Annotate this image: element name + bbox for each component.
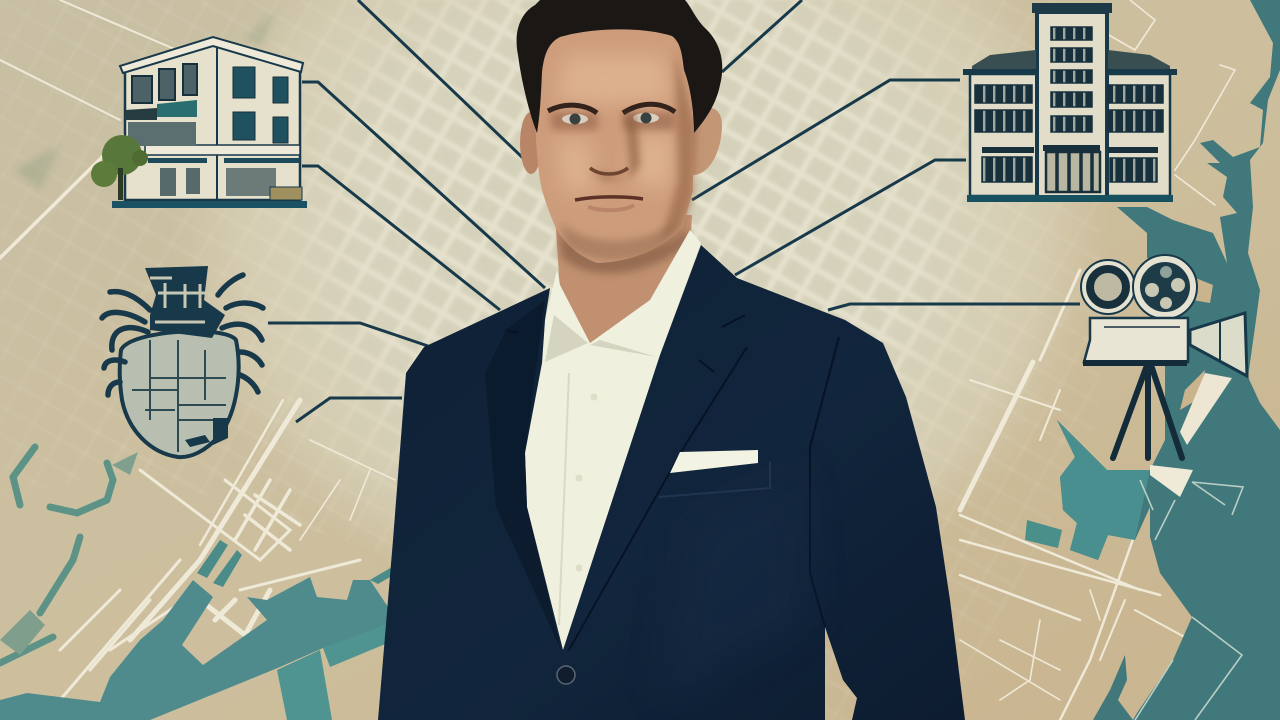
lower lip bbox=[588, 205, 634, 210]
icon: crest bbox=[102, 266, 263, 457]
pocket square bbox=[670, 450, 758, 473]
shirt bbox=[525, 230, 701, 650]
connector lines bbox=[268, 0, 1080, 422]
placket bbox=[559, 373, 569, 625]
icon: film camera bbox=[1081, 255, 1247, 458]
pocket outline bbox=[659, 462, 770, 497]
jacket button bbox=[557, 666, 575, 684]
forehead and cheek highlight bbox=[555, 55, 675, 195]
collar shade bbox=[545, 315, 657, 362]
man bbox=[378, 0, 965, 720]
left ear bbox=[520, 112, 542, 174]
water: right coast and sea bbox=[1025, 0, 1280, 720]
jacket bbox=[378, 245, 965, 720]
chin stubble shadow bbox=[560, 218, 680, 261]
neck shadow bbox=[558, 228, 690, 274]
eye sockets bbox=[550, 112, 675, 130]
water: left marshes bbox=[0, 447, 138, 663]
jacket shading bbox=[485, 300, 561, 650]
water: lower left bay bbox=[0, 540, 395, 720]
neck bbox=[555, 215, 692, 345]
face side shadow bbox=[660, 50, 696, 245]
shirt buttons bbox=[576, 394, 598, 572]
jacket highlight bbox=[660, 470, 810, 700]
eyes bbox=[562, 114, 588, 124]
hair bbox=[517, 0, 722, 133]
icon: classical tower building bbox=[963, 3, 1177, 202]
tree bbox=[91, 135, 148, 200]
jacket seams bbox=[506, 315, 839, 650]
brows bbox=[548, 104, 675, 113]
nose underside bbox=[590, 168, 628, 174]
face bbox=[535, 16, 693, 263]
right ear bbox=[692, 108, 722, 175]
mouth bbox=[575, 197, 643, 200]
icon: corner building bbox=[91, 37, 307, 208]
nose shadow bbox=[590, 115, 640, 180]
